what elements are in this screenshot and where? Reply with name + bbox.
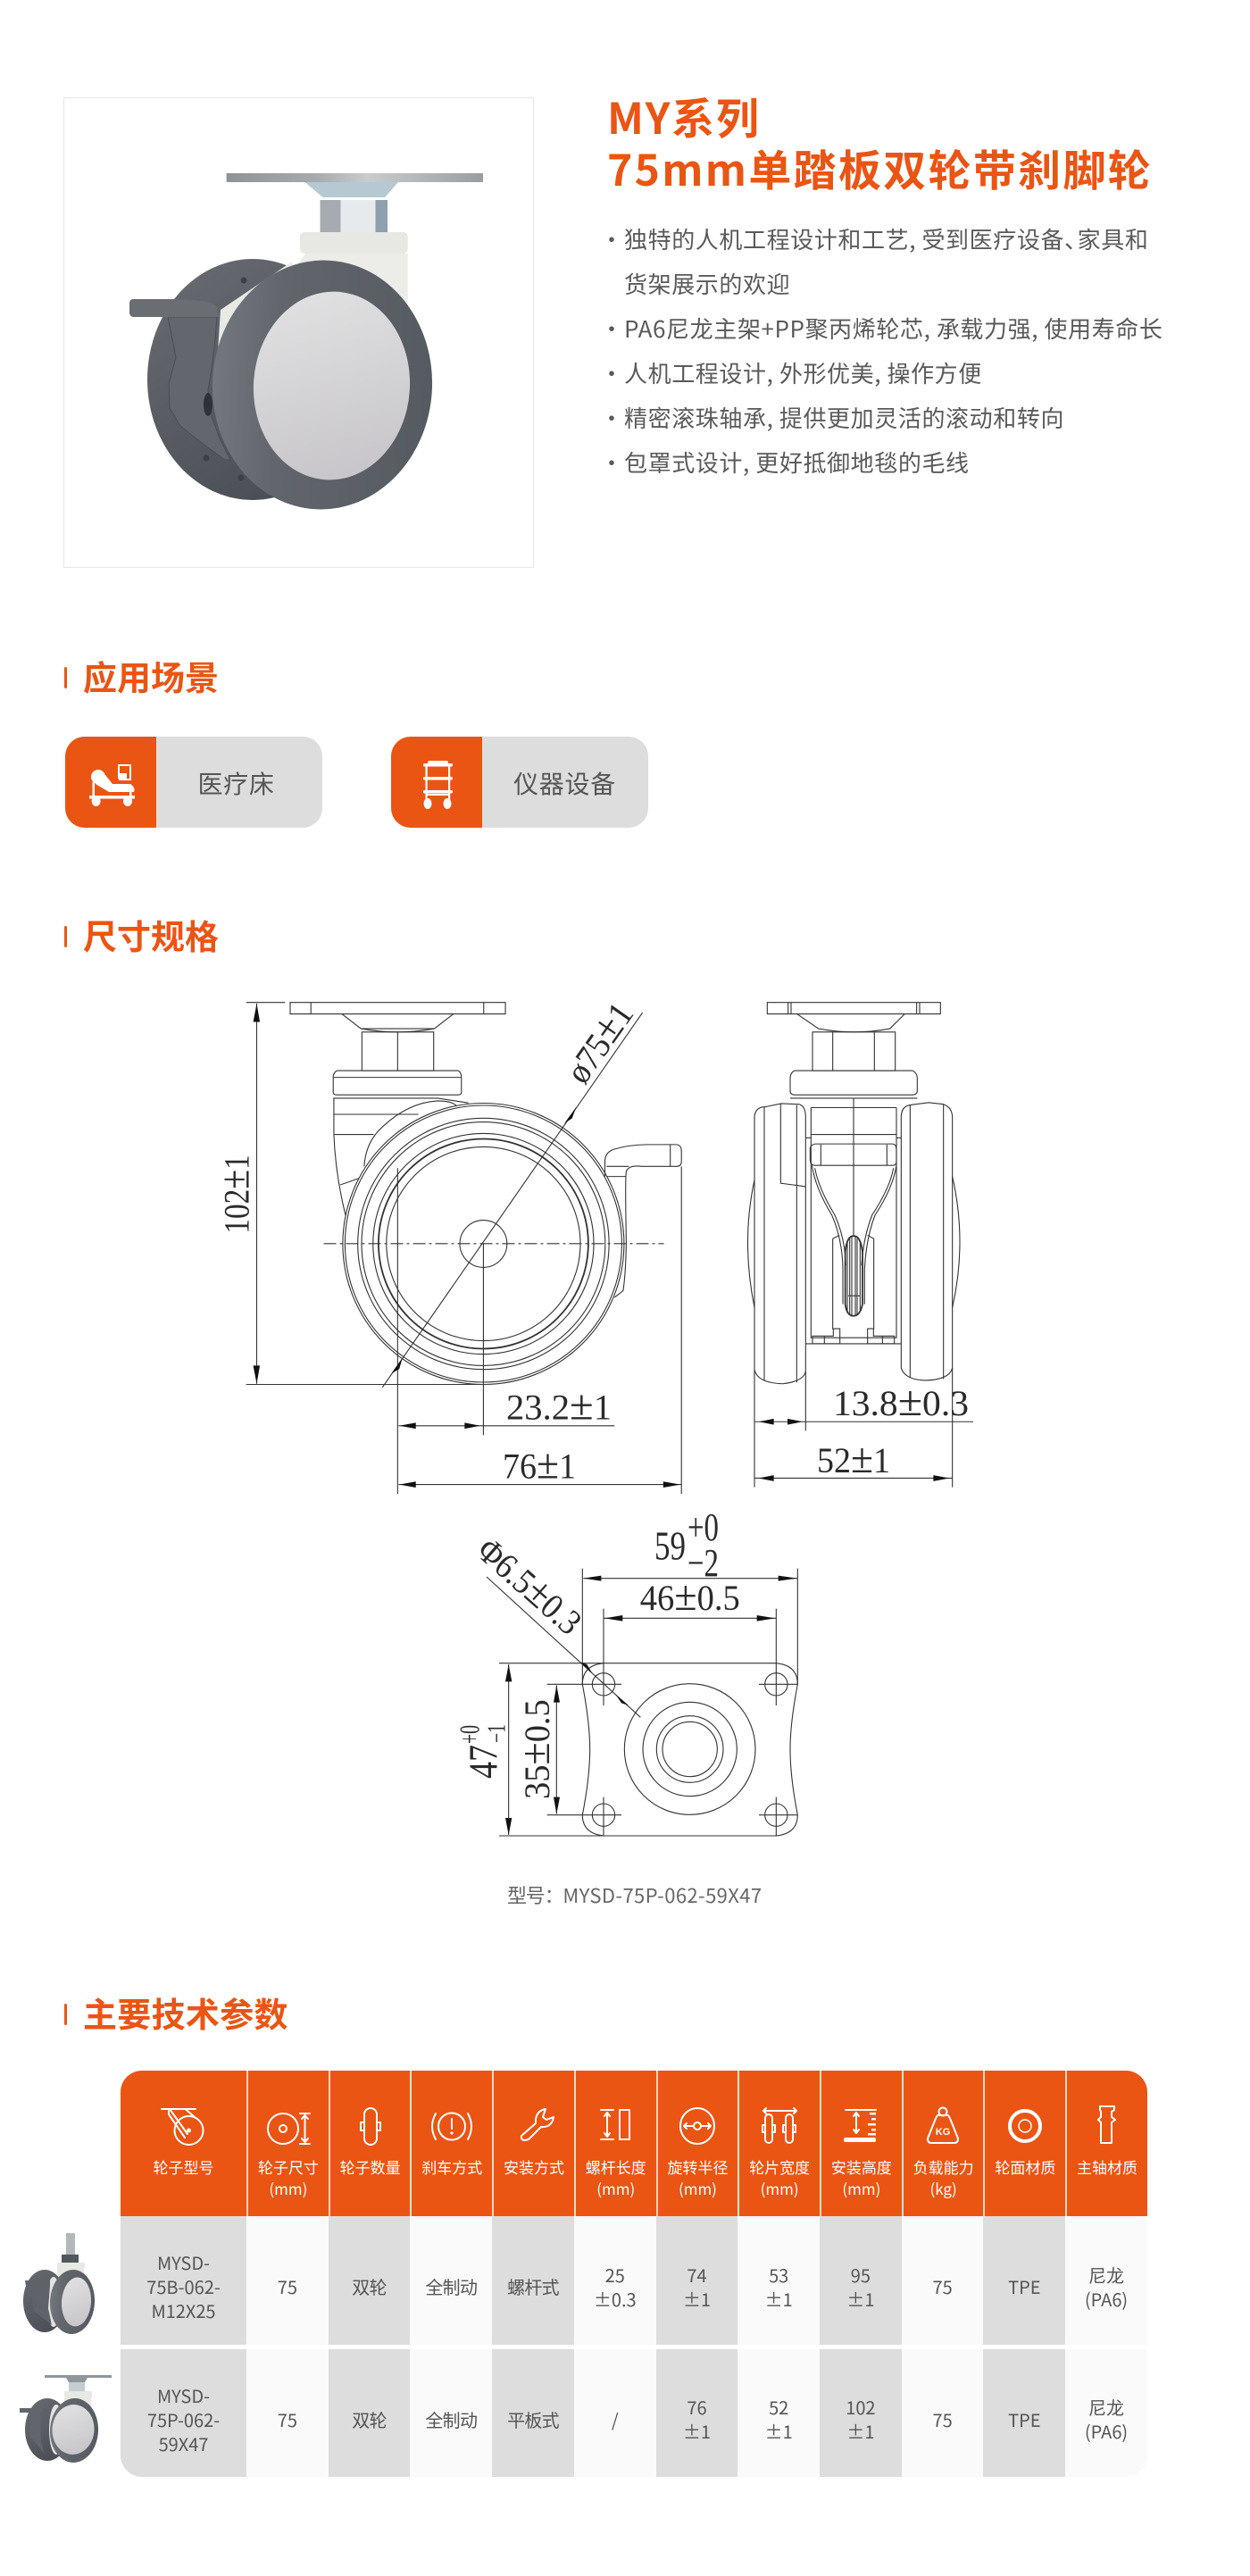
icon: wheel count: [361, 2108, 380, 2145]
thumbnail: threaded-stem caster: [23, 2233, 96, 2335]
dimension: length 47: +0: [454, 1725, 486, 1744]
parameter table: 25: [605, 2261, 625, 2288]
heading: 尺寸规格: 尺寸规格: [83, 910, 219, 959]
parameter table: 平板式: [507, 2405, 559, 2432]
feature 2: PA6尼龙主架+PP聚丙烯轮芯,承载力强,使用寿命长: [624, 312, 1162, 345]
parameter table: M12X25: [151, 2297, 216, 2323]
dimension: overall width 52: 52±1: [817, 1435, 890, 1482]
parameter table: ±0.3: [594, 2286, 637, 2311]
parameter table: ±1: [846, 2286, 874, 2311]
parameter table: 95: [851, 2261, 871, 2288]
parameter table: 全制动: [425, 2273, 477, 2299]
icon: brake: [432, 2113, 471, 2139]
feature 4: 精密滚珠轴承,提供更加灵活的滚动和转向: [624, 401, 1064, 434]
parameter table: 主轴材质: [1077, 2155, 1138, 2178]
wheel rings: [343, 1104, 624, 1384]
parameter table: (mm): [679, 2177, 717, 2198]
parameter table: [121, 2071, 1147, 2477]
parameter table: TPE: [1008, 2273, 1041, 2299]
icon: instrument cart: [423, 761, 453, 809]
parameter table: /: [612, 2405, 619, 2432]
parameter table: ±1: [765, 2418, 793, 2444]
product photo: caster wheel: [129, 173, 483, 515]
feature 5: ·: [600, 446, 623, 479]
parameter table: 53: [769, 2261, 788, 2288]
dimension: offset 23.2: 23.2±1: [506, 1382, 612, 1430]
icon: wrench: [521, 2109, 554, 2140]
back wheel: [25, 2398, 70, 2461]
icon: load capacity: [928, 2107, 958, 2143]
parameter table: 轮子尺寸: [258, 2155, 319, 2178]
dimension: width 59: [654, 1505, 719, 1585]
brake: [25, 2280, 52, 2325]
feature 2: ·: [600, 312, 623, 345]
feature 1: ·: [600, 222, 623, 255]
dimension: length 47: [454, 1724, 512, 1779]
brake: [20, 2408, 45, 2454]
fork body: [268, 254, 408, 357]
drawing: mounting plate with dimensions: [454, 1505, 797, 1836]
parameter table: 75: [278, 2405, 297, 2432]
dimension: length 47: 47: [461, 1745, 506, 1779]
icon: wheel width: [762, 2108, 796, 2143]
collar: [300, 232, 408, 254]
brake arm hole: [204, 393, 212, 416]
parameter table: 尼龙: [1088, 2261, 1124, 2288]
brake arm: [168, 317, 230, 460]
front view outline: [747, 1003, 973, 1488]
feature 1: 货架展示的欢迎: [624, 267, 790, 300]
back wheel: [23, 2270, 66, 2332]
product photo frame: [63, 97, 534, 568]
threaded stud: [66, 2233, 75, 2255]
parameter table: 双轮: [352, 2405, 387, 2432]
icon: mount height: [844, 2110, 876, 2142]
back wheel: [147, 259, 358, 500]
dimension: hole diameter: Φ6.5±0.3: [468, 1526, 593, 1644]
parameter table: 双轮: [352, 2273, 387, 2299]
parameter table: 安装高度: [831, 2155, 892, 2178]
front wheel: [48, 2397, 100, 2463]
plate cone: [305, 182, 398, 197]
parameter table: 59X47: [159, 2430, 208, 2455]
model caption: 型号：MYSD-75P-062-59X47: [507, 1880, 762, 1909]
parameter table: 52: [769, 2394, 788, 2420]
nut: [69, 2382, 85, 2391]
parameter table: (kg): [929, 2177, 957, 2198]
parameter table: 75: [932, 2405, 953, 2432]
parameter table: 负载能力: [913, 2155, 974, 2178]
dimension: hole spacing 35: 35±0.5: [512, 1699, 559, 1799]
parameter table: (mm): [596, 2177, 635, 2198]
parameter table: 安装方式: [504, 2155, 564, 2178]
icon: wheel size: [268, 2113, 310, 2144]
side view outline: [246, 1003, 681, 1494]
parameter table: 75P-062-: [147, 2405, 220, 2432]
title line 2: 75mm单踏板双轮带刹脚轮: [607, 136, 1153, 198]
parameter table: MYSD-: [157, 2382, 210, 2407]
icon: screw length: [601, 2110, 629, 2139]
icon: swivel radius: [680, 2108, 714, 2144]
parameter table: 76: [687, 2394, 707, 2420]
parameter table: ±1: [765, 2286, 793, 2311]
feature 4: ·: [600, 401, 623, 434]
parameter table: (mm): [761, 2177, 799, 2198]
dimension: width 59: 59: [654, 1523, 686, 1569]
front wheel: [48, 2269, 96, 2335]
icon: caster: [162, 2109, 204, 2145]
parameter table: (PA6): [1085, 2286, 1128, 2311]
feature list: [600, 222, 1162, 479]
fork sliver between wheels: [218, 262, 295, 458]
feature 1: [600, 222, 1148, 300]
parameter table: 102: [846, 2394, 876, 2420]
title line 1: MY系列: [607, 84, 761, 146]
icon: load capacity: KG: [936, 2127, 950, 2138]
collar: [64, 2391, 92, 2429]
wheel screws: [204, 277, 246, 480]
brake pedal: [129, 299, 219, 317]
parameter table: 全制动: [425, 2405, 477, 2432]
parameter table: 轮面材质: [995, 2155, 1055, 2178]
title: [607, 84, 1153, 198]
chip: 医疗床: 医疗床: [197, 765, 275, 801]
hex nut: [320, 200, 388, 232]
mounting plate: [227, 173, 483, 182]
thumbnail: plate-mount caster: [20, 2375, 112, 2463]
chip: 医疗床: [65, 737, 322, 828]
parameter table: 轮片宽度: [749, 2155, 810, 2178]
dimension: width 59: −2: [688, 1541, 719, 1585]
chip: 仪器设备: 仪器设备: [513, 765, 616, 801]
dimension: length 47: −1: [484, 1724, 512, 1743]
fork sliver: [49, 2405, 63, 2455]
dimension: length 76: 76±1: [503, 1441, 576, 1488]
parameter table: 轮子型号: [154, 2155, 214, 2178]
front wheel tyre: [206, 254, 438, 515]
heading: 应用场景: 应用场景: [83, 651, 219, 700]
drawing: side view with dimensions: [212, 992, 681, 1494]
collar: [57, 2263, 85, 2295]
drawing: front view with dimensions: [747, 1003, 973, 1488]
parameter table: TPE: [1008, 2405, 1041, 2432]
parameter table: (mm): [842, 2177, 880, 2198]
parameter table: 74: [687, 2261, 707, 2288]
parameter table: ±1: [846, 2418, 874, 2444]
feature 1: 独特的人机工程设计和工艺,受到医疗设备、家具和: [624, 222, 1148, 255]
dimension: hole spacing 46: 46±0.5: [640, 1572, 740, 1620]
dimension: width 59: +0: [688, 1505, 719, 1549]
heading: 主要技术参数: 主要技术参数: [83, 1988, 288, 2037]
parameter table: 螺杆式: [507, 2273, 559, 2299]
parameter table: 刹车方式: [421, 2155, 482, 2178]
fork sliver: [46, 2277, 61, 2327]
plate outline: [487, 1569, 797, 1836]
parameter table: (PA6): [1085, 2418, 1128, 2444]
parameter table: 75B-062-: [146, 2273, 221, 2299]
parameter table: 轮子数量: [340, 2155, 401, 2178]
nut: [62, 2255, 79, 2263]
chip: 仪器设备: [391, 737, 648, 828]
feature 3: ·: [600, 356, 623, 389]
parameter table: 75: [932, 2273, 953, 2299]
plate: [45, 2375, 112, 2382]
front wheel hub: [247, 287, 416, 485]
feature 5: 包罩式设计,更好抵御地毯的毛线: [624, 446, 970, 479]
icon: tread material: [1010, 2111, 1040, 2141]
parameter table: ±1: [683, 2286, 711, 2311]
dimension: wheel width 13.8: 13.8±0.3: [833, 1378, 969, 1425]
dimension: diameter 75: ø75±1: [554, 992, 643, 1091]
icon: stem material: [1098, 2106, 1115, 2143]
parameter table: 旋转半径: [667, 2155, 728, 2178]
parameter table: 螺杆长度: [586, 2155, 646, 2178]
feature 3: 人机工程设计,外形优美,操作方便: [624, 356, 982, 389]
parameter table: ±1: [683, 2418, 711, 2444]
parameter table: 尼龙: [1088, 2394, 1124, 2420]
icon: hospital bed: [89, 764, 135, 806]
parameter table: MYSD-: [157, 2249, 210, 2275]
dimension: height 102: 102±1: [212, 1155, 259, 1234]
parameter table: (mm): [269, 2177, 307, 2198]
parameter table: 75: [278, 2273, 297, 2299]
